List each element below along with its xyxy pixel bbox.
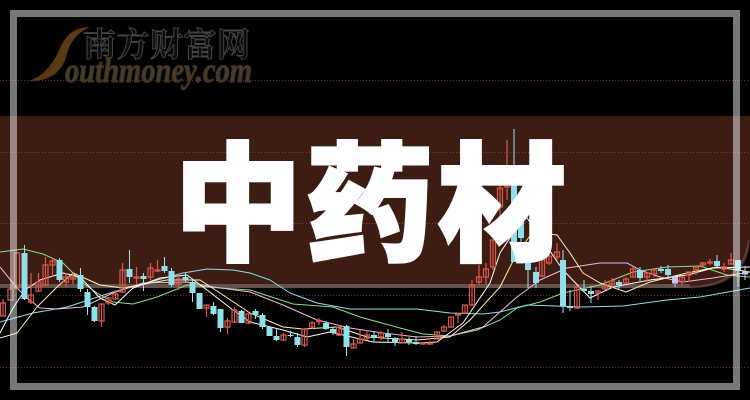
brown title band <box>0 116 750 288</box>
logo swoosh S <box>28 27 90 81</box>
medium moving average pink <box>0 263 750 337</box>
short moving average white <box>0 215 750 343</box>
logo chinese name: 南方财富网 <box>83 27 250 64</box>
logo: Southmoney <box>28 27 252 90</box>
title: 药 <box>306 135 434 278</box>
title: 中 <box>174 135 302 278</box>
long moving average cyan <box>0 269 750 322</box>
title <box>174 135 566 278</box>
moving average lines <box>0 215 750 343</box>
rising candles red <box>0 140 734 348</box>
long moving average green <box>0 249 750 336</box>
title: 材 <box>438 135 566 278</box>
short moving average cream <box>0 232 750 340</box>
falling candles cyan <box>22 129 748 356</box>
candlestick chart <box>0 129 748 356</box>
logo latin name: outhmoney.com <box>65 51 252 90</box>
